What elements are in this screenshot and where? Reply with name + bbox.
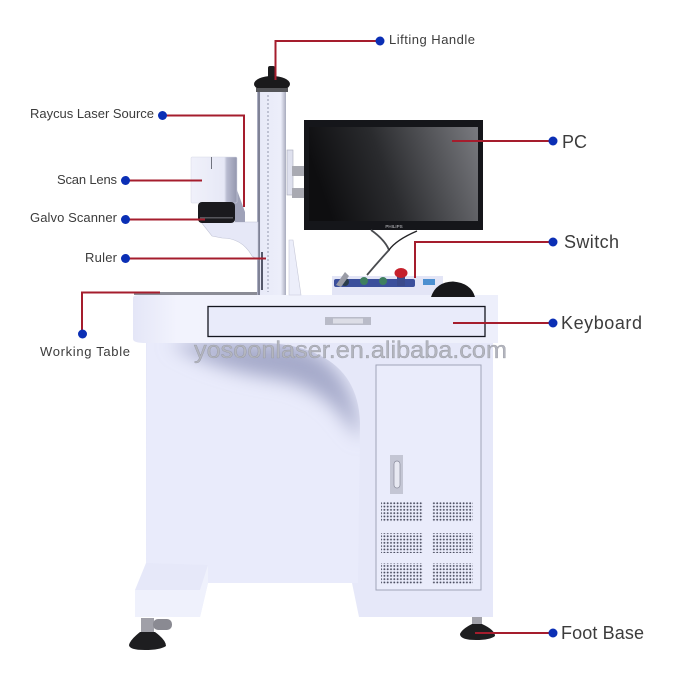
infographic: laser marking machine diagram — [30, 34, 644, 650]
working table top — [133, 292, 498, 343]
monitor: PHILIPS — [385, 224, 403, 229]
door handle — [390, 455, 403, 494]
column — [257, 92, 301, 295]
callout: switch — [415, 232, 619, 278]
callout: galvo scanner — [30, 210, 205, 225]
callout: switch: Switch — [564, 232, 619, 252]
callout: ruler: Ruler — [85, 250, 118, 265]
callout: ruler — [85, 250, 266, 265]
callout: lifting handle — [276, 32, 475, 80]
callout: lifting handle: Lifting Handle — [389, 32, 475, 47]
callout: scan lens: Scan Lens — [57, 172, 118, 187]
callout: PC — [452, 132, 587, 152]
monitor arm — [287, 150, 304, 198]
keyboard drawer — [208, 306, 485, 336]
callout: keyboard: Keyboard — [561, 313, 642, 333]
drawer handle — [325, 317, 371, 325]
emergency stop button — [394, 268, 408, 286]
callout: raycus laser source — [30, 106, 244, 207]
ventilation grilles — [381, 502, 473, 584]
monitor cables — [367, 230, 417, 275]
watermark: yosoonlaser.en.alibaba.com — [194, 337, 507, 364]
lens — [198, 202, 235, 223]
callout: scan lens — [57, 172, 202, 187]
callout: foot base — [475, 623, 644, 643]
cabinet door — [376, 365, 481, 590]
callout: foot base: Foot Base — [561, 623, 644, 643]
foot: right — [460, 616, 495, 640]
callout: PC: PC — [562, 132, 587, 152]
foot: left — [129, 618, 172, 650]
lifting handle — [254, 66, 290, 92]
mouse — [431, 282, 475, 297]
callout: keyboard — [453, 313, 642, 333]
callout: galvo scanner: Galvo Scanner — [30, 210, 118, 225]
machine illustration — [129, 66, 498, 650]
scan head — [191, 157, 258, 260]
callout: raycus laser source: Raycus Laser Source — [30, 106, 154, 121]
callout: working table: Working Table — [40, 344, 130, 359]
control panel — [332, 268, 443, 295]
callout: working table — [40, 292, 160, 359]
cabinet body — [135, 340, 493, 617]
monitor — [304, 120, 483, 230]
